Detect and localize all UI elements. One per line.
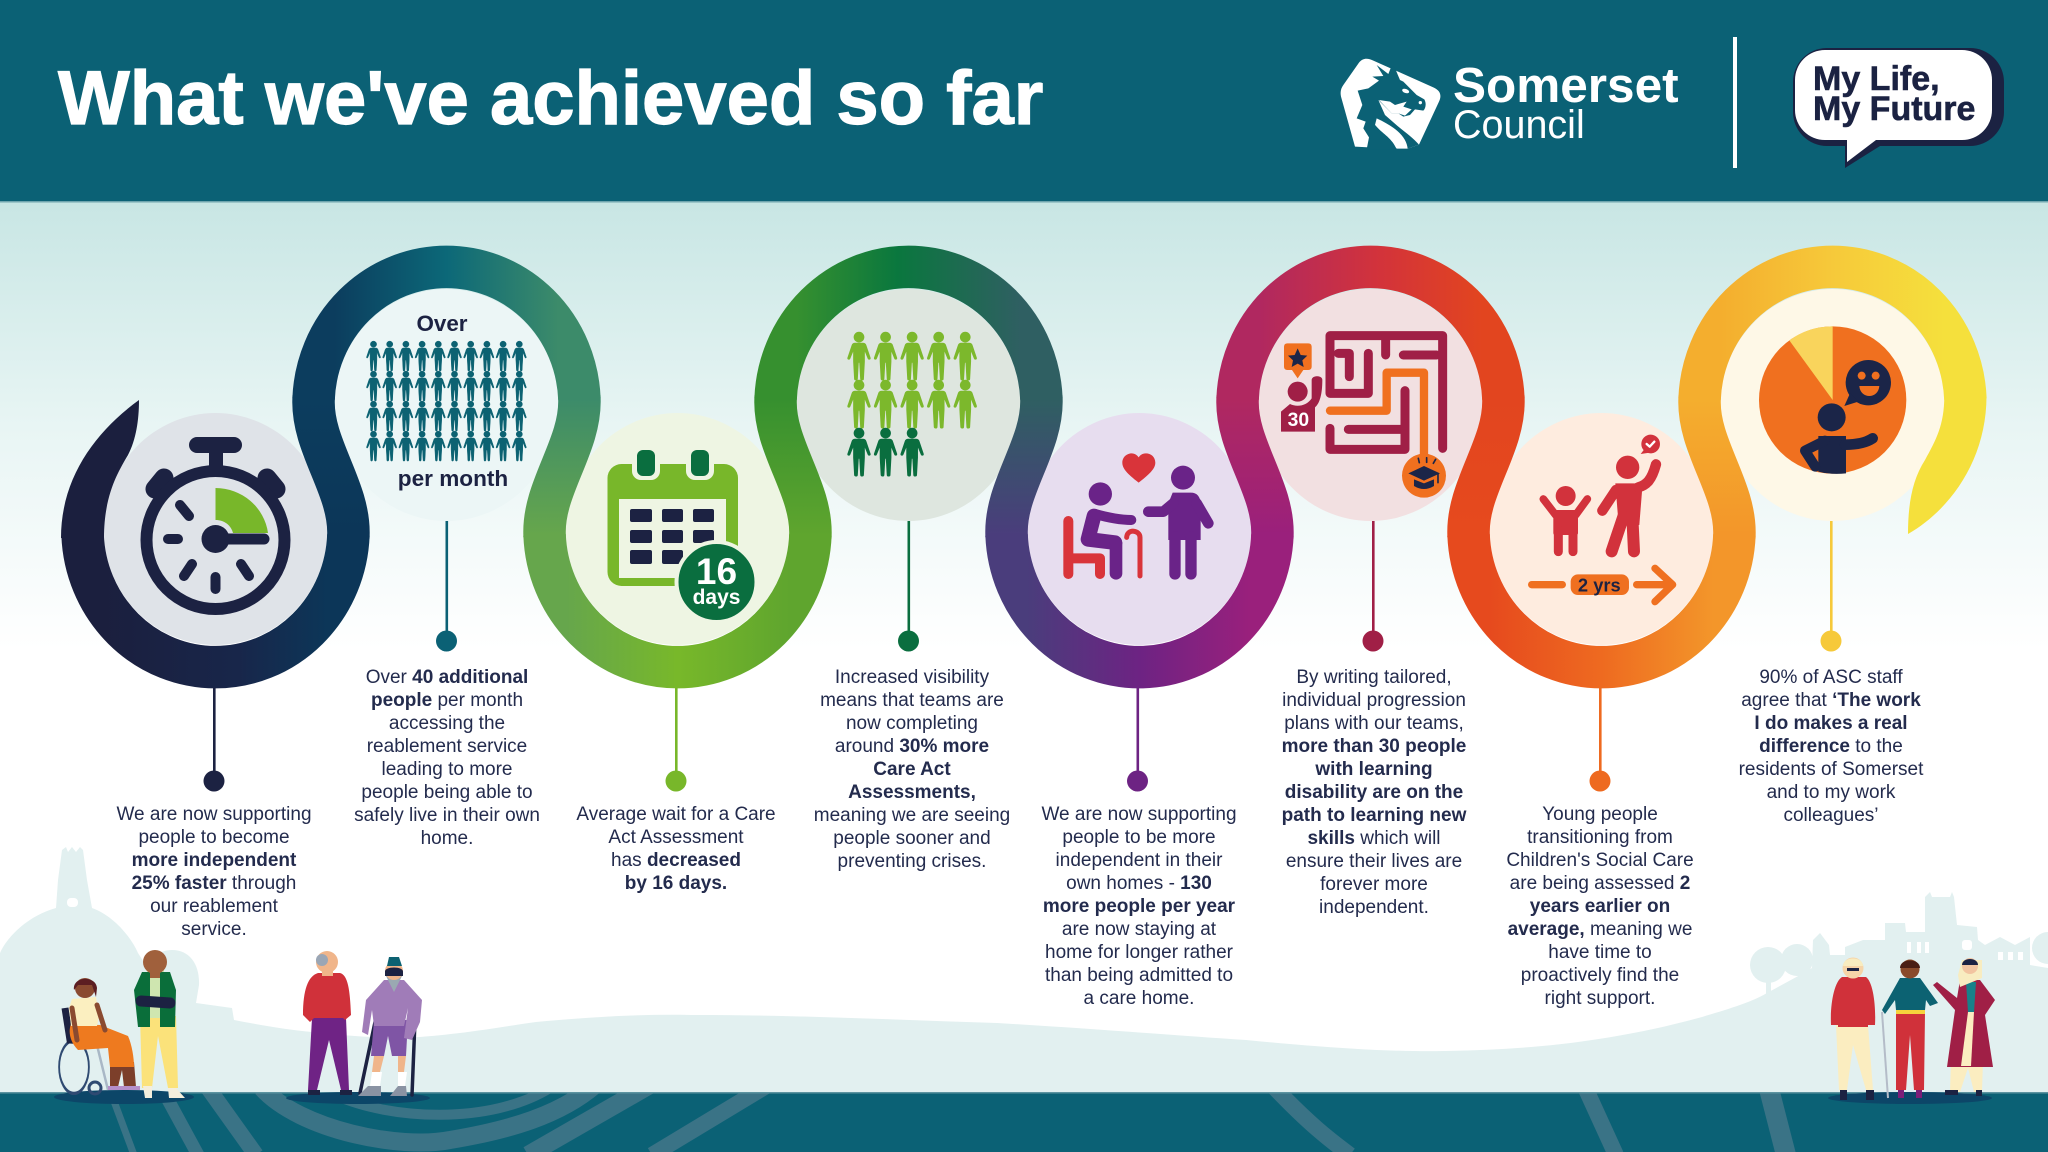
connector line and dot: panel 7 [1590,688,1610,792]
panel: inner lobe discs [104,289,1944,645]
text block: 130 more people per year: more people per year [1043,896,1236,917]
text block: 40 additional people: people being able to [361,782,533,803]
text block: 40 additional people: home. [421,828,473,849]
connector line and dot: panel 8 [1820,521,1842,652]
text block: 30 people learning new skills: individual progression [1282,690,1466,711]
text block: 30 people learning new skills: disability are on the [1285,782,1463,803]
logo wordmark: Somerset [1453,58,1679,113]
text block: 90% of ASC staff: colleagues’ [1783,805,1879,826]
logo: My Life, My Future speech bubble: My Future [1813,90,1975,128]
text block: 30 people learning new skills: independent. [1319,897,1429,918]
text block: 30% more assessments: Care Act [873,759,951,780]
text block: 40 additional people: safely live in their own [354,805,540,826]
text block: 40 additional people: accessing the [389,713,505,734]
text block: reablement 25% faster: 25% faster through [132,873,296,894]
text block: 30 people learning new skills: skills which will [1307,828,1441,849]
logo: Somerset Council [1341,58,1679,149]
text block: 30 people learning new skills: ensure their lives are [1286,851,1462,872]
text block: 40 additional people: reablement service [367,736,527,757]
text block: 90% of ASC staff: residents of Somerset [1739,759,1924,780]
icon: 90 percent pie with happy speech bubble [1759,326,1906,474]
icon: maze with learner and graduation cap: 30 [1288,410,1309,431]
logo: My Life, My Future speech bubble [1793,48,2004,168]
text block: 40 additional people: people per month [371,690,523,711]
text block: 130 more people per year: a care home. [1084,988,1194,1009]
text block: 130 more people per year: home for longer rather [1045,942,1234,963]
icon: calendar with 16 days badge: 16 [696,551,737,592]
text block: reablement 25% faster [116,804,312,940]
text block: assessed 2 years earlier: have time to [1548,942,1652,963]
icon: calendar with 16 days badge: days [693,586,740,609]
text block: 30 people learning new skills: forever more [1320,874,1428,895]
connector line and dot: panel 4 [898,521,919,652]
text block: reablement 25% faster: people to become [138,827,290,848]
text block: 130 more people per year: own homes - 130 [1066,873,1212,894]
text block: wait decreased by 16 days: by 16 days. [625,873,727,894]
text block: 30 people learning new skills: plans with our teams, [1284,713,1464,734]
text block: assessed 2 years earlier: Children's Social Care [1506,850,1694,871]
text block: assessed 2 years earlier: years earlier on [1530,896,1670,917]
connector line and dot: panel 5 [1127,688,1148,792]
icon: 40 people per month grid [366,311,526,491]
connector line and dot: panel 3 [666,688,686,792]
icon: young person, adult and 2 yrs arrow: 2 yrs [1578,574,1621,595]
icon: stopwatch [146,437,284,609]
serpentine gradient ribbon [61,267,1986,667]
text block: 90% of ASC staff: and to my work [1767,782,1896,803]
text block: 30% more assessments: now completing [846,713,978,734]
ground band with road lines [0,1092,2048,1152]
text block: 130 more people per year: We are now supporting [1041,804,1237,825]
text block: wait decreased by 16 days: Average wait for a Care [576,804,776,825]
text block: 40 additional people [354,667,540,849]
text block: assessed 2 years earlier: right support. [1545,988,1655,1009]
text block: assessed 2 years earlier: average, meaning we [1508,919,1692,940]
text block: assessed 2 years earlier: transitioning from [1527,827,1673,848]
text block: 30 people learning new skills: By writing tailored, [1296,667,1452,688]
text block: 130 more people per year: people to be more [1062,827,1216,848]
text block: 30% more assessments: meaning we are seeing [814,805,1010,826]
illustration: older man and person on crutches [286,951,430,1104]
header divider [1733,37,1737,168]
icon: 40 people per month grid: Over [416,311,468,336]
text block: 30 people learning new skills: path to learning new [1282,805,1467,826]
text block: 30% more assessments: means that teams are [820,690,1004,711]
logo: My Life, My Future speech bubble: My Life, [1813,60,1940,98]
text block: wait decreased by 16 days: Act Assessment [608,827,744,848]
connector line and dot: panel 1 [204,688,224,792]
icon: maze with learner and graduation cap [1281,336,1446,498]
text block: 30% more assessments: Increased visibility [835,667,990,688]
title: What we've achieved so far [58,56,1043,141]
connector line and dot: panel 2 [436,521,457,652]
icon: 13 people group [848,332,976,476]
logo: Somerset Council: Council [1453,103,1585,147]
text block: 90% of ASC staff: 90% of ASC staff [1759,667,1903,688]
text block: 30% more assessments: around 30% more [835,736,989,757]
icon: dragon crest [1341,59,1440,149]
text block: 30 people learning new skills: with learning [1314,759,1433,780]
text block: reablement 25% faster: We are now supporting [116,804,312,825]
text block: wait decreased by 16 days [576,804,776,894]
text block: 130 more people per year: are now staying at [1062,919,1217,940]
text block: 40 additional people: Over 40 additional [366,667,528,688]
text block: 30% more assessments: preventing crises. [838,851,986,872]
text block: 90% of ASC staff: agree that ‘The work [1741,690,1921,711]
text block: 90% of ASC staff [1739,667,1924,826]
text block: 130 more people per year [1041,804,1237,1009]
text block: assessed 2 years earlier [1506,804,1694,1009]
text block: 40 additional people: leading to more [382,759,512,780]
text block: 30 people learning new skills [1282,667,1467,918]
icon: carer with seated older person and heart [1068,453,1208,576]
header band [0,0,2048,202]
text block: 30% more assessments [814,667,1010,872]
text block: assessed 2 years earlier: Young people [1542,804,1658,825]
text block: assessed 2 years earlier: are being assessed 2 [1510,873,1690,894]
connector line and dot: panel 6 [1362,521,1384,652]
illustration: wheelchair user and standing man [54,950,194,1104]
text block: wait decreased by 16 days: has decreased [611,850,741,871]
text block: 30 people learning new skills: more than 30 people [1282,736,1466,757]
text block: 30% more assessments: Assessments, [848,782,976,803]
text block: assessed 2 years earlier: proactively find the [1521,965,1679,986]
text block: 30% more assessments: people sooner and [833,828,991,849]
text block: 90% of ASC staff: I do makes a real [1754,713,1908,734]
landscape: hills and skyline silhouette [0,847,2048,1100]
icon: calendar with 16 days badge [608,446,756,622]
icon: 40 people per month grid: per month [398,466,508,491]
text block: 130 more people per year: independent in their [1056,850,1223,871]
text block: reablement 25% faster: service. [181,919,247,940]
text block: reablement 25% faster: our reablement [150,896,279,917]
icon: young person, adult and 2 yrs arrow [1532,435,1673,602]
text block: reablement 25% faster: more independent [132,850,297,871]
text block: 130 more people per year: than being admitted to [1045,965,1233,986]
illustration: three standing people [1828,958,1995,1104]
text block: 90% of ASC staff: difference to the [1759,736,1903,757]
